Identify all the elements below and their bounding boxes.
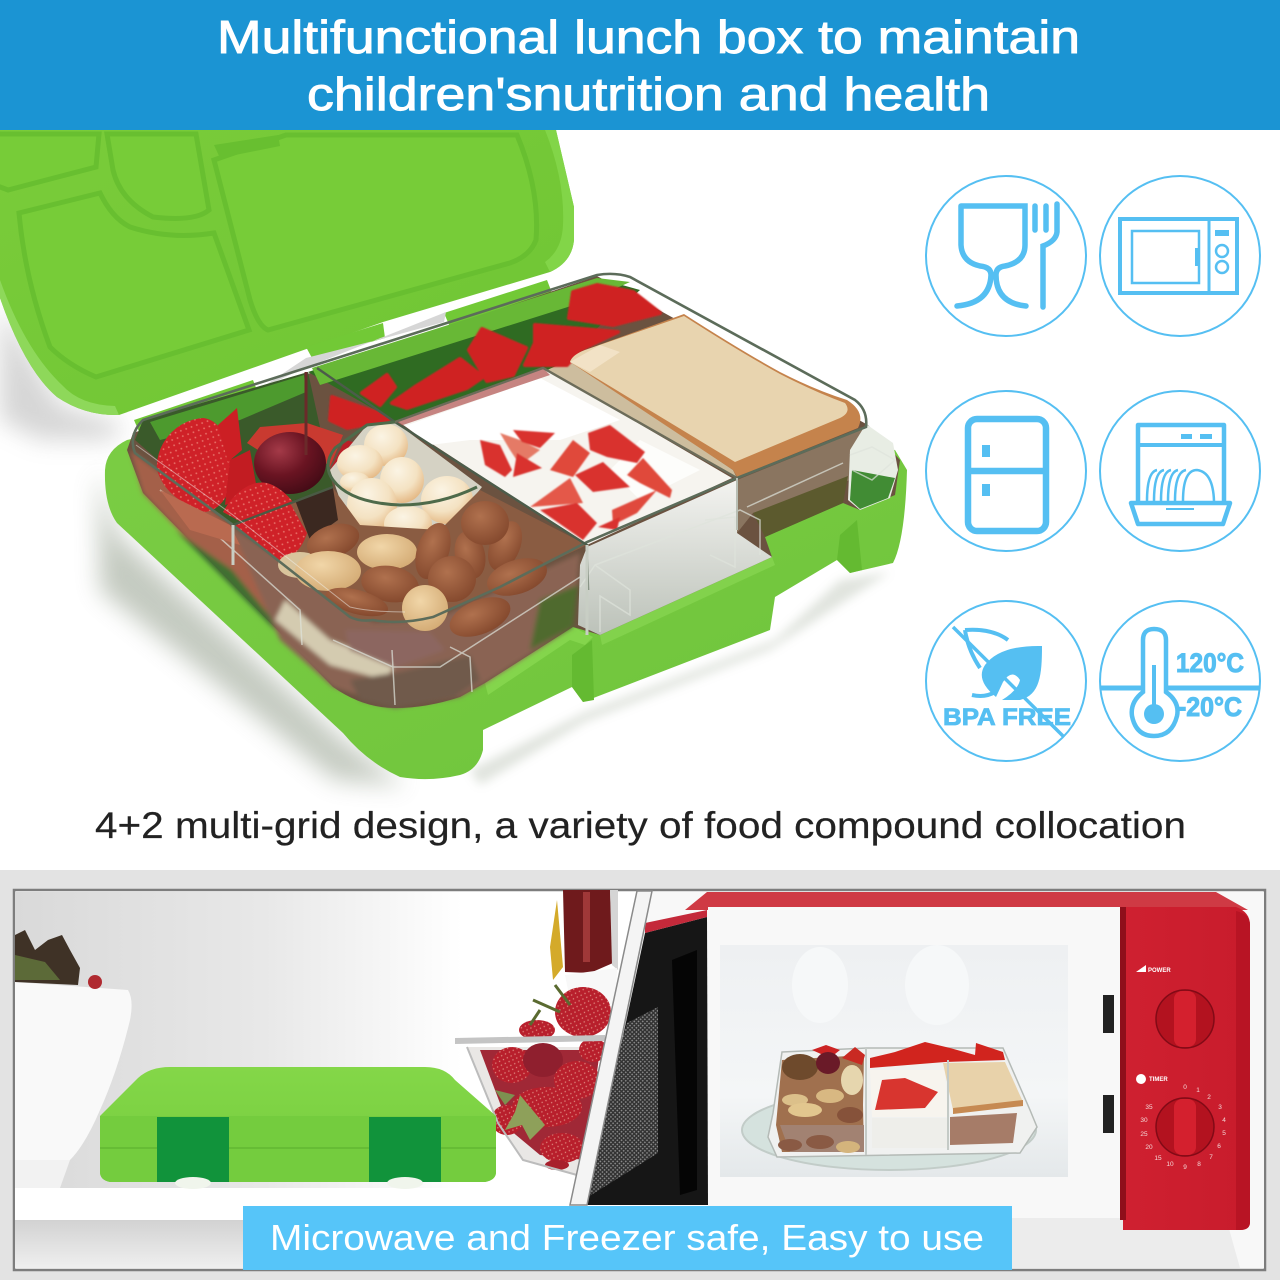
timer knob — [1136, 1074, 1214, 1156]
icon: BPA free: BPA FREE — [943, 704, 1071, 731]
timer scale: 8 — [1197, 1161, 1201, 1168]
timer scale: 35 — [1145, 1104, 1153, 1111]
icon: BPA free — [926, 601, 1086, 761]
icon: microwave — [1100, 176, 1260, 336]
title — [217, 11, 1080, 120]
oven cavity — [708, 907, 1122, 1217]
tray rim and dividers — [133, 274, 866, 635]
puffs compartment — [330, 422, 482, 542]
small tray of food — [768, 1042, 1037, 1157]
caption banner: Microwave and Freezer safe, Easy to use — [270, 1217, 984, 1258]
bottom photo panel — [0, 870, 1280, 1280]
caption: 4+2 multi-grid design, a variety of food compound collocation — [95, 805, 1186, 846]
timer scale: 5 — [1222, 1130, 1226, 1137]
lid shadow — [0, 305, 125, 440]
yoghurt wall — [578, 480, 772, 635]
nuts compartment — [232, 488, 587, 645]
bread wall — [737, 428, 866, 533]
open green lid — [0, 130, 574, 434]
title: children'snutrition and health — [307, 68, 990, 120]
sauce bottles — [550, 890, 618, 1005]
clip details — [160, 447, 895, 705]
timer scale: 0 — [1183, 1084, 1187, 1091]
timer scale: 15 — [1154, 1155, 1162, 1162]
timer scale: 7 — [1209, 1154, 1213, 1161]
icon: temperature range: -20°C — [1178, 692, 1242, 722]
icon: temperature range — [1100, 601, 1260, 761]
strawberries and grape — [157, 408, 365, 545]
bread compartment background — [547, 360, 737, 478]
slice of bread — [570, 314, 860, 477]
photo: fridge shelf with closed lunch box — [15, 890, 637, 1268]
timer scale: 1 — [1196, 1087, 1200, 1094]
power knob — [1136, 965, 1214, 1048]
feature icons — [926, 176, 1260, 761]
red control panel — [1120, 907, 1250, 1230]
glass plate — [742, 1090, 1036, 1170]
flange — [848, 424, 898, 510]
open door — [587, 917, 708, 1205]
timer scale: 3 — [1218, 1104, 1222, 1111]
caption banner — [243, 1206, 1012, 1270]
icon: food safe — [926, 176, 1086, 336]
timer scale: 4 — [1222, 1117, 1226, 1124]
closed green lunch box — [100, 1067, 496, 1189]
front shadow — [470, 572, 890, 785]
tomatoes — [330, 285, 660, 428]
green base — [105, 400, 907, 779]
yoghurt compartment — [397, 368, 732, 545]
timer scale — [1140, 1084, 1226, 1171]
timer scale: 20 — [1145, 1144, 1153, 1151]
timer scale: 30 — [1140, 1117, 1148, 1124]
lunch box product photo — [0, 130, 907, 785]
photo: red microwave with lunch tray — [587, 892, 1264, 1268]
icon: fridge — [926, 391, 1086, 551]
power knob: POWER — [1148, 968, 1171, 974]
diagonal divider — [570, 891, 652, 1205]
glass bowl of strawberries — [455, 985, 611, 1175]
lid hinge tabs — [134, 280, 552, 434]
timer scale: 25 — [1140, 1131, 1148, 1138]
icon: dishwasher — [1100, 391, 1260, 551]
timer scale: 2 — [1207, 1094, 1211, 1101]
timer scale: 6 — [1217, 1143, 1221, 1150]
timer knob: TIMER — [1149, 1077, 1168, 1083]
title: Multifunctional lunch box to maintain — [217, 11, 1080, 63]
white bowl with salad — [15, 930, 132, 1160]
icon: temperature range: 120°C — [1176, 648, 1244, 678]
header banner — [0, 0, 1280, 130]
timer scale: 10 — [1166, 1161, 1174, 1168]
base shadow — [98, 470, 405, 785]
fruit compartment background — [135, 278, 640, 525]
timer scale: 9 — [1183, 1164, 1187, 1171]
clear tray lower walls — [127, 276, 900, 708]
